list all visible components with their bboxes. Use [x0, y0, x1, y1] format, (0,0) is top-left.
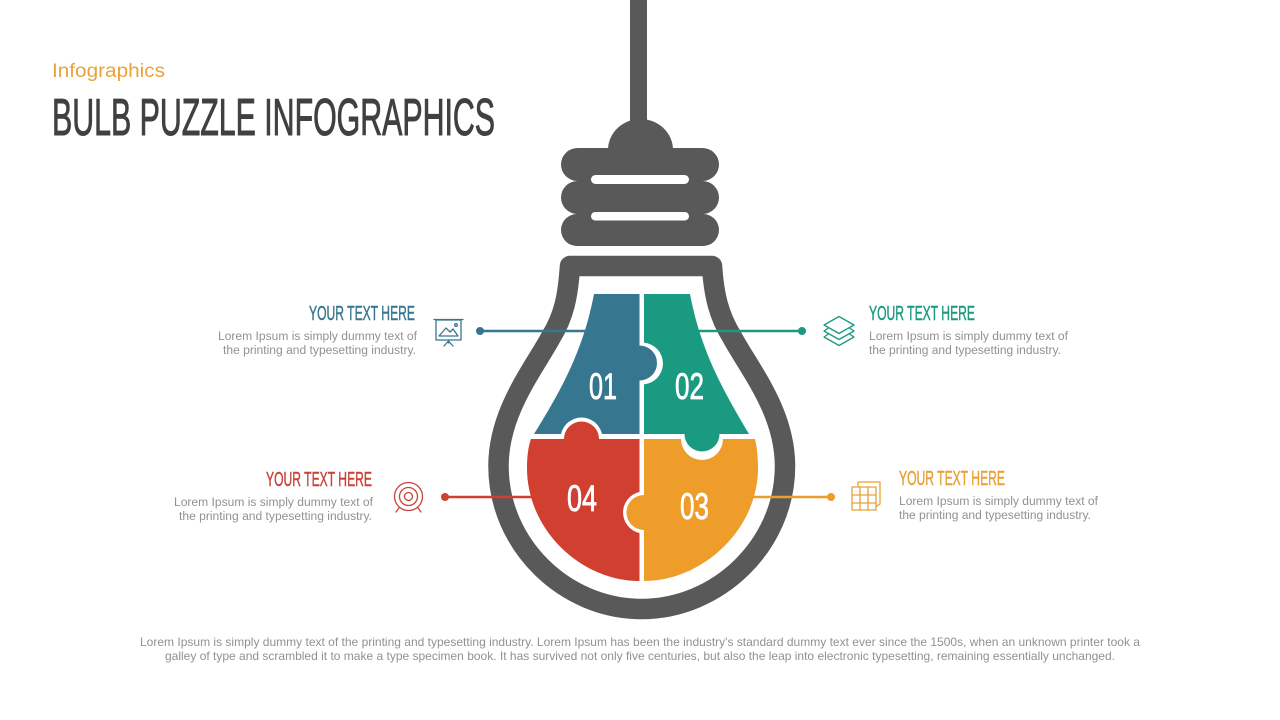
- icon: presentation board: [434, 320, 463, 346]
- callout 04: [174, 469, 422, 523]
- callout 01: [218, 303, 463, 357]
- callout 03 text: Lorem Ipsum is simply dummy text of: [899, 496, 1099, 508]
- callout 01 text: [218, 331, 418, 357]
- puzzle piece 03: [626, 439, 758, 581]
- bulb glass outline: [498, 266, 785, 609]
- icon: overlapping frames: [852, 482, 880, 510]
- callout 04 text: [174, 497, 374, 523]
- callout 04 text: the printing and typesetting industry.: [179, 511, 372, 523]
- puzzle piece 02: [644, 294, 749, 452]
- icon: stacked layers: [824, 316, 854, 346]
- puzzle piece 03: 03: [680, 486, 709, 527]
- callout 04 text: Lorem Ipsum is simply dummy text of: [174, 497, 374, 509]
- icon: target: [394, 482, 422, 512]
- callout 03 heading: YOUR TEXT HERE: [899, 468, 1005, 490]
- callout 03 text: the printing and typesetting industry.: [899, 510, 1091, 522]
- callout 04 heading: YOUR TEXT HERE: [266, 469, 372, 491]
- callout 02 heading: YOUR TEXT HERE: [869, 303, 975, 325]
- puzzle piece 01: 01: [589, 366, 617, 407]
- puzzle piece 04: [527, 422, 640, 581]
- connector line: teal: [695, 327, 806, 335]
- puzzle piece 04: 04: [567, 478, 597, 519]
- callout 02 text: the printing and typesetting industry.: [869, 345, 1061, 357]
- header: [52, 61, 495, 147]
- footer paragraph: galley of type and scrambled it to make a type specimen book. It has survived not only five centuries, but also the leap into electronic typesetting, remaining essentially unchanged.: [165, 649, 1115, 663]
- connector line: blue: [476, 327, 590, 335]
- puzzle piece 02: 02: [675, 366, 704, 407]
- callout 02 text: [869, 331, 1069, 357]
- callout 03 text: [899, 496, 1099, 522]
- callout 01 text: the printing and typesetting industry.: [223, 345, 416, 357]
- callout 01 text: Lorem Ipsum is simply dummy text of: [218, 331, 418, 343]
- subtitle: Infographics: [52, 61, 165, 82]
- title: BULB PUZZLE INFOGRAPHICS: [52, 89, 495, 147]
- callout 03: [852, 468, 1099, 522]
- lightbulb: [441, 0, 835, 609]
- puzzle piece 01: [534, 294, 657, 434]
- bulb cord and socket: [561, 0, 719, 246]
- footer paragraph: [140, 635, 1140, 663]
- callout 02 text: Lorem Ipsum is simply dummy text of: [869, 331, 1069, 343]
- footer paragraph: Lorem Ipsum is simply dummy text of the printing and typesetting industry. Lorem Ipsum has been the industry's standard dummy text ever since the 1500s, when an unknown printer took a: [140, 635, 1140, 649]
- callout 01 heading: YOUR TEXT HERE: [309, 303, 415, 325]
- callout 02: [824, 303, 1069, 357]
- connector line: red: [441, 493, 535, 501]
- connector line: orange: [750, 493, 835, 501]
